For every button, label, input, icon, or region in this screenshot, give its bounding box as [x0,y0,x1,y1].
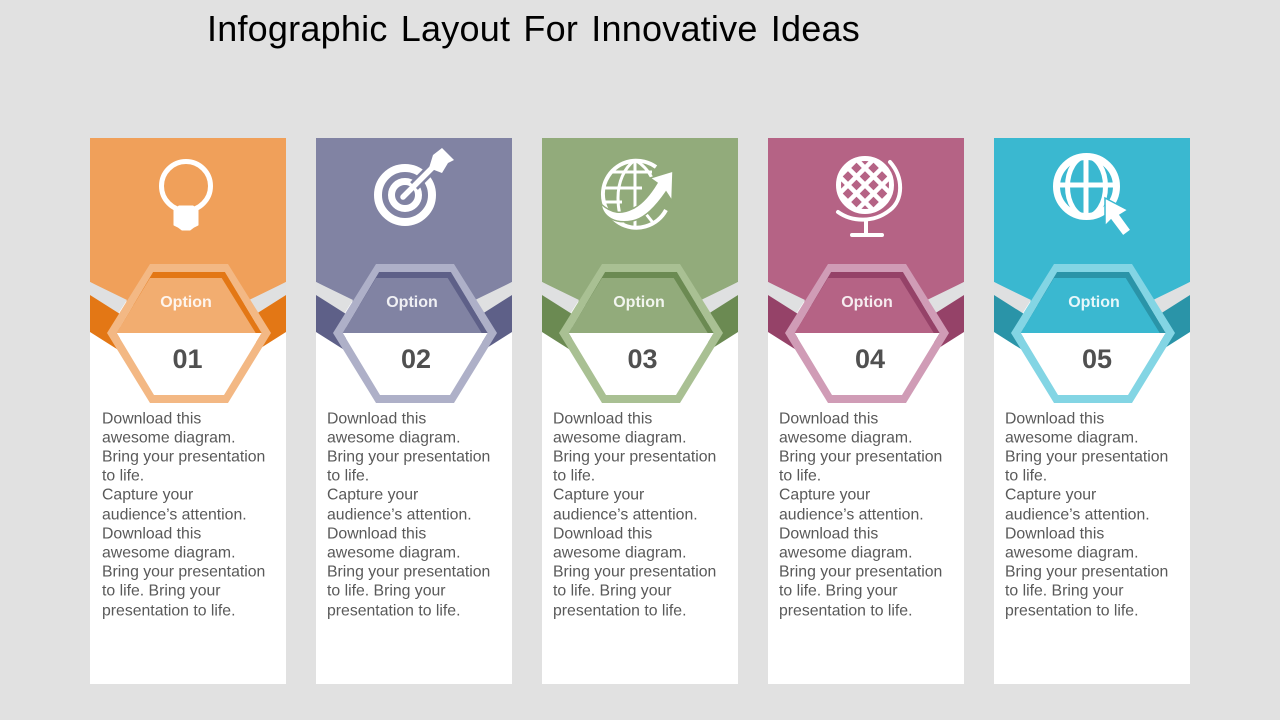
panel: option 05 [994,138,1190,684]
body text: presentation to life. [553,602,686,620]
body text: awesome diagram. [553,544,686,562]
panel: option 01 [90,138,286,684]
body text: Bring your presentation [779,448,942,466]
body text: Capture your [1005,486,1096,504]
title: Infographic Layout For Innovative Ideas [207,8,860,49]
body text: Capture your [327,486,418,504]
body text: Bring your presentation [1005,448,1168,466]
body text: awesome diagram. [102,430,235,446]
panel: option 02 [316,138,512,684]
icon: target with arrow [378,148,454,222]
number: 05 [1082,344,1112,374]
icon: desk globe [838,158,900,235]
panel: option 04 [768,138,964,684]
body text: awesome diagram. [327,430,460,446]
body text: Download this [1005,526,1104,542]
body text: audience’s attention. [553,506,698,524]
body text: Bring your presentation [102,564,265,580]
coloured header [90,138,286,334]
number: 02 [401,344,431,374]
body text: presentation to life. [1005,602,1138,620]
body text: presentation to life. [102,602,235,620]
body text: Bring your presentation [779,564,942,580]
body text: audience’s attention. [102,506,247,524]
body text: to life. Bring your [1005,582,1124,600]
body text: Bring your presentation [1005,564,1168,580]
body text: awesome diagram. [779,430,912,446]
body text: awesome diagram. [1005,430,1138,446]
body text: to life. [553,468,595,484]
body text: Bring your presentation [327,448,490,466]
body text: to life. Bring your [327,582,446,600]
coloured header [542,138,738,334]
number: 03 [627,344,658,374]
body text: Bring your presentation [327,564,490,580]
body text: audience’s attention. [779,506,924,524]
option label: Option [160,294,212,311]
body text: audience’s attention. [327,506,472,524]
body text: Download this [1005,410,1104,428]
body text: to life. [327,468,369,484]
icon: light bulb [162,162,210,230]
body text: to life. [1005,468,1047,484]
option label: Option [386,294,438,311]
body text: awesome diagram. [779,544,912,562]
option label: Option [841,294,893,311]
body text: Download this [553,526,652,542]
body text: Capture your [779,486,870,504]
panel: option 03 [542,138,738,684]
body text: audience’s attention. [1005,506,1150,524]
number: 01 [172,344,203,374]
body text: Download this [102,410,201,428]
body text: Bring your presentation [553,564,716,580]
body text: Bring your presentation [102,448,265,466]
body text: Bring your presentation [553,448,716,466]
body text: Download this [327,410,426,428]
hexagon badge [107,264,271,403]
body text: Download this [779,410,878,428]
body text: to life. [779,468,821,484]
icon: globe with rising arrow [601,160,673,228]
body text: awesome diagram. [1005,544,1138,562]
body text: Capture your [553,486,644,504]
coloured header [316,138,512,334]
body text: to life. Bring your [102,582,221,600]
option label: Option [613,294,665,311]
body text: to life. Bring your [553,582,672,600]
number: 04 [855,344,885,374]
coloured header [994,138,1190,334]
body text: awesome diagram. [553,430,686,446]
body text: presentation to life. [327,602,460,620]
body text: Capture your [102,486,193,504]
hexagon badge [559,264,723,403]
body text: to life. Bring your [779,582,898,600]
coloured header [768,138,964,334]
hexagon badge [1011,264,1175,403]
body text: to life. [102,468,144,484]
body text: Download this [327,526,426,542]
body text: awesome diagram. [327,544,460,562]
icon: web globe with cursor [1056,156,1131,236]
body text: Download this [779,526,878,542]
body text: presentation to life. [779,602,912,620]
hexagon badge [785,264,949,403]
body text: awesome diagram. [102,544,235,562]
body text: Download this [102,526,201,542]
option label: Option [1068,294,1120,311]
hexagon badge [333,264,497,403]
body text: Download this [553,410,652,428]
